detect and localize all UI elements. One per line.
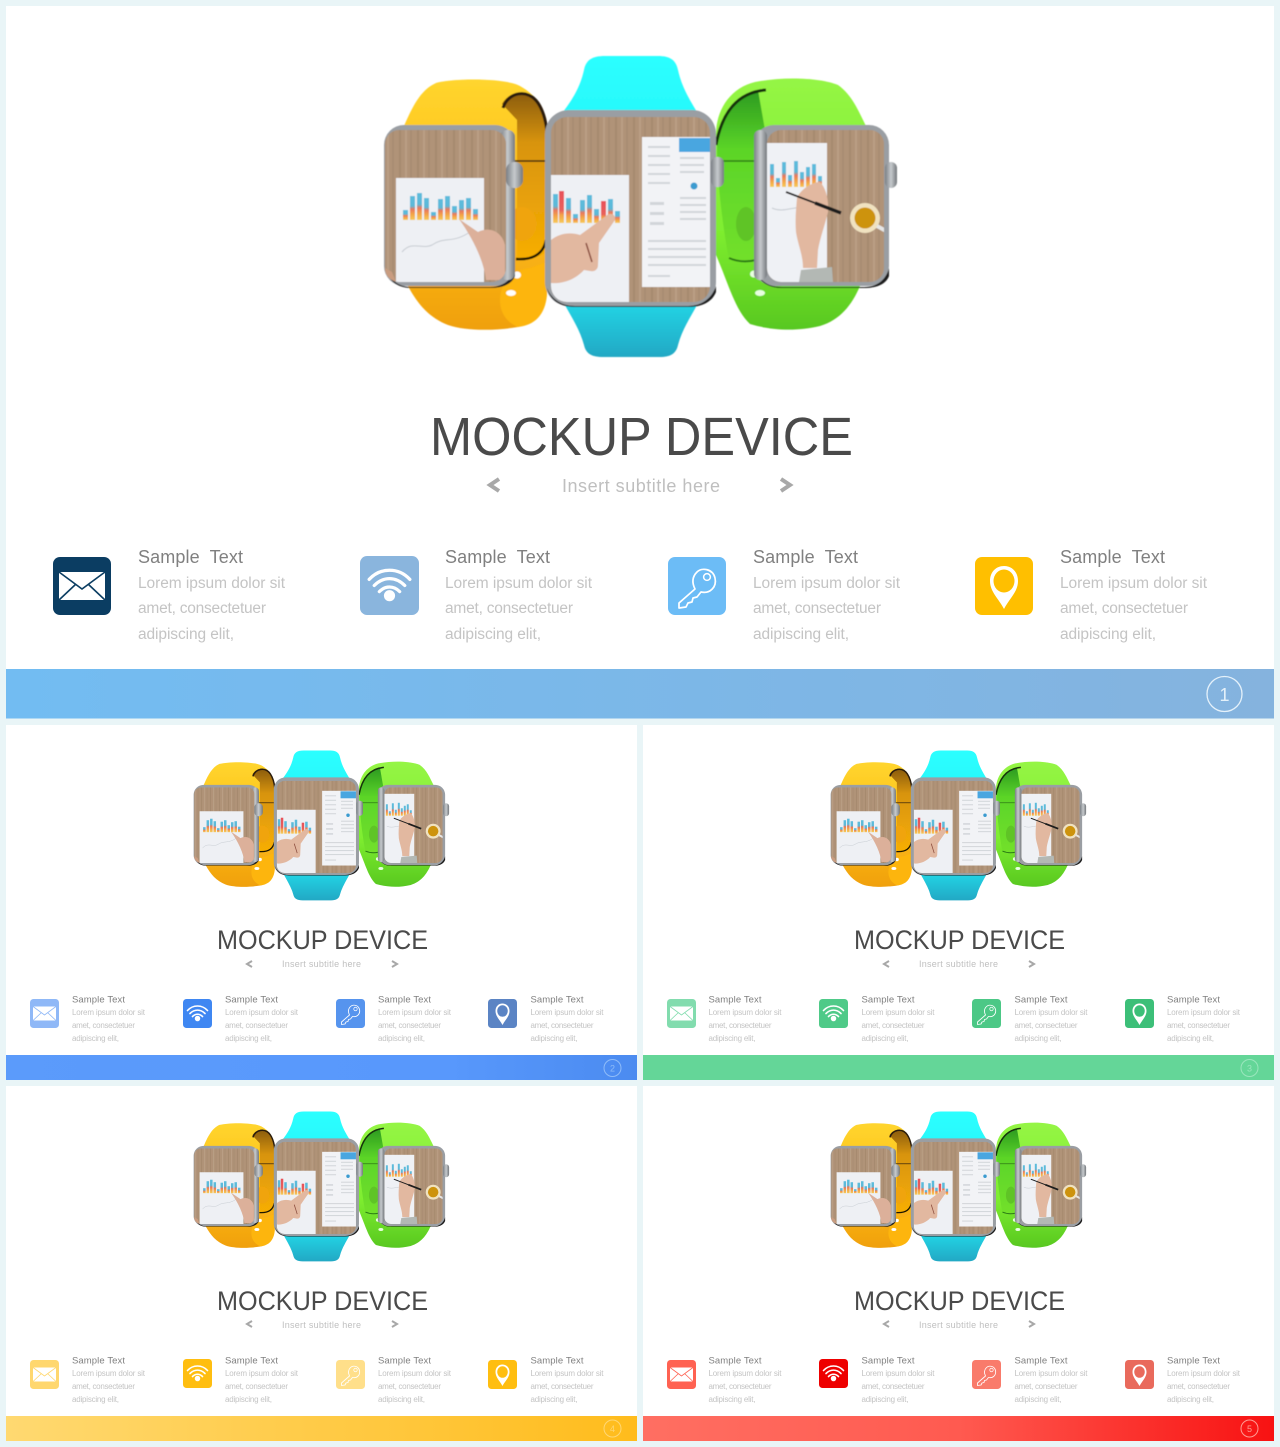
text block 1: Sample Text <box>72 1356 125 1366</box>
page number badge: 5 <box>1247 1424 1252 1434</box>
text block 4: Lorem ipsum dolor sit <box>530 1369 604 1378</box>
footer bar <box>6 1416 637 1441</box>
text block 4: amet, consectetuer <box>530 1382 594 1391</box>
text block 3: adipiscing elit, <box>378 1395 425 1404</box>
text block 3: amet, consectetuer <box>378 1382 441 1391</box>
arrow: left chevron <box>884 1321 889 1327</box>
image: three smart watches <box>831 750 1086 900</box>
text block 1: amet, consectetuer <box>138 600 266 617</box>
text block 2 <box>225 994 299 1043</box>
text block 2: adipiscing elit, <box>862 1034 908 1043</box>
text block 4: amet, consectetuer <box>1167 1021 1230 1030</box>
text block 3 <box>378 1356 452 1404</box>
text block 1: Lorem ipsum dolor sit <box>72 1008 146 1017</box>
text block 2: Sample Text <box>225 994 278 1006</box>
text block 1: adipiscing elit, <box>708 1034 756 1043</box>
arrow: left chevron <box>490 479 499 491</box>
text block 2: Lorem ipsum dolor sit <box>862 1008 935 1017</box>
text block 4: adipiscing elit, <box>1167 1395 1214 1404</box>
text block 3: Lorem ipsum dolor sit <box>1014 1369 1088 1378</box>
text block 4: Lorem ipsum dolor sit <box>530 1008 604 1017</box>
text block 3: amet, consectetuer <box>1014 1021 1078 1030</box>
icon: mail <box>667 999 696 1028</box>
text block 1 <box>708 1356 782 1404</box>
slide background <box>643 725 1274 1080</box>
text block 3 <box>378 994 452 1043</box>
title: MOCKUP DEVICE <box>854 925 1065 955</box>
text block 3: adipiscing elit, <box>378 1034 425 1043</box>
text block 4: amet, consectetuer <box>1167 1382 1230 1391</box>
title: MOCKUP DEVICE <box>854 1286 1065 1316</box>
text block 4: Lorem ipsum dolor sit <box>1060 575 1208 592</box>
text block 2: Lorem ipsum dolor sit <box>225 1008 299 1017</box>
text block 3 <box>1014 994 1088 1043</box>
arrow: left chevron <box>884 961 889 967</box>
text block 2: amet, consectetuer <box>862 1021 925 1030</box>
slide background <box>6 725 637 1080</box>
arrow: right chevron <box>1029 1321 1034 1327</box>
text block 4: adipiscing elit, <box>1167 1034 1214 1043</box>
text block 3: Sample Text <box>378 1356 431 1366</box>
text block 3: Sample Text <box>1014 1356 1068 1366</box>
arrow: right chevron <box>781 479 790 491</box>
text block 3: Lorem ipsum dolor sit <box>1014 1008 1088 1017</box>
panel: main slide <box>6 6 1274 718</box>
page number badge <box>604 1420 621 1437</box>
footer bar <box>643 1416 1274 1441</box>
page number badge <box>1241 1420 1258 1437</box>
text block 1: Sample Text <box>708 1356 762 1366</box>
text block 2: adipiscing elit, <box>862 1395 908 1404</box>
icon: wifi <box>819 1359 848 1388</box>
footer bar <box>6 1055 637 1080</box>
text block 1: adipiscing elit, <box>138 626 234 643</box>
text block 2: amet, consectetuer <box>445 600 573 617</box>
arrow: right chevron <box>1029 961 1034 967</box>
icon: mail <box>30 1360 59 1389</box>
page number badge <box>1207 676 1242 712</box>
text block 2: amet, consectetuer <box>225 1382 288 1391</box>
text block 4 <box>1167 994 1241 1043</box>
text block 2: adipiscing elit, <box>225 1395 272 1404</box>
slide background <box>6 6 1274 718</box>
text block 2: Sample Text <box>862 994 915 1006</box>
subtitle: Insert subtitle here <box>562 476 720 496</box>
footer bar <box>643 1055 1274 1080</box>
page number badge: 1 <box>1219 685 1230 705</box>
icon: key <box>336 999 365 1028</box>
text block 3: Lorem ipsum dolor sit <box>378 1369 452 1378</box>
text block 2: Sample Text <box>862 1356 915 1366</box>
text block 4: Sample Text <box>1167 1356 1220 1366</box>
panel: green slide <box>643 725 1274 1080</box>
text block 1: amet, consectetuer <box>72 1382 135 1391</box>
text block 3: Sample Text <box>378 994 431 1006</box>
icon: key <box>972 1360 1001 1389</box>
text block 1 <box>138 547 286 643</box>
page number badge: 3 <box>1247 1064 1252 1074</box>
text block 4: amet, consectetuer <box>1060 600 1188 617</box>
text block 4: adipiscing elit, <box>530 1034 578 1043</box>
text block 4: Sample Text <box>530 1356 584 1366</box>
slide background <box>643 1086 1274 1441</box>
icon: wifi <box>183 999 212 1028</box>
text block 4: Lorem ipsum dolor sit <box>1167 1369 1241 1378</box>
text block 3: amet, consectetuer <box>1014 1382 1078 1391</box>
slide background <box>6 1086 637 1441</box>
text block 4: Sample Text <box>1167 994 1220 1006</box>
arrow: right chevron <box>392 961 397 967</box>
text block 4: adipiscing elit, <box>530 1395 578 1404</box>
icon: location pin <box>1125 1360 1154 1389</box>
title: MOCKUP DEVICE <box>217 1286 428 1316</box>
page number badge <box>1241 1060 1258 1076</box>
text block 4 <box>530 1356 604 1404</box>
text block 3 <box>753 547 901 643</box>
text block 2: Sample Text <box>225 1356 278 1366</box>
image: three smart watches <box>194 1111 449 1261</box>
text block 1: adipiscing elit, <box>72 1395 119 1404</box>
image: three smart watches <box>831 1111 1086 1261</box>
text block 4: Sample Text <box>530 994 584 1006</box>
text block 1 <box>72 1356 146 1404</box>
text block 1 <box>72 994 146 1043</box>
text block 3: adipiscing elit, <box>1014 1034 1062 1043</box>
text block 3: Sample Text <box>753 547 858 567</box>
subtitle: Insert subtitle here <box>282 959 361 969</box>
image: three smart watches <box>194 750 449 900</box>
page number badge <box>604 1060 621 1076</box>
page number badge: 2 <box>610 1064 615 1074</box>
text block 1: Lorem ipsum dolor sit <box>708 1369 782 1378</box>
icon: key <box>972 999 1001 1028</box>
text block 2: amet, consectetuer <box>225 1021 288 1030</box>
page number badge: 4 <box>610 1424 615 1434</box>
text block 1: amet, consectetuer <box>708 1021 772 1030</box>
footer bar <box>6 669 1274 718</box>
text block 1: Lorem ipsum dolor sit <box>138 575 286 592</box>
subtitle: Insert subtitle here <box>919 1320 998 1330</box>
text block 3: amet, consectetuer <box>753 600 881 617</box>
icon: key <box>336 1360 365 1389</box>
text block 1: Sample Text <box>708 994 762 1006</box>
icon: location pin <box>975 557 1033 615</box>
panel: yellow slide <box>6 1086 637 1441</box>
text block 4 <box>530 994 604 1043</box>
text block 2: adipiscing elit, <box>445 626 541 643</box>
subtitle: Insert subtitle here <box>282 1320 361 1330</box>
text block 1: amet, consectetuer <box>708 1382 772 1391</box>
text block 2: Lorem ipsum dolor sit <box>445 575 593 592</box>
text block 4: Sample Text <box>1060 547 1165 567</box>
text block 2: adipiscing elit, <box>225 1034 272 1043</box>
icon: location pin <box>1125 999 1154 1028</box>
arrow: left chevron <box>247 1321 252 1327</box>
text block 1: Sample Text <box>72 994 125 1006</box>
text block 3 <box>1014 1356 1088 1404</box>
icon: wifi <box>360 556 419 615</box>
text block 1: amet, consectetuer <box>72 1021 135 1030</box>
icon: mail <box>53 557 111 615</box>
text block 1 <box>708 994 782 1043</box>
image: three smart watches <box>384 56 897 357</box>
text block 1: Lorem ipsum dolor sit <box>72 1369 146 1378</box>
icon: mail <box>667 1360 696 1389</box>
text block 4: amet, consectetuer <box>530 1021 594 1030</box>
text block 3: Lorem ipsum dolor sit <box>378 1008 452 1017</box>
text block 2 <box>445 547 593 643</box>
text block 2: Sample Text <box>445 547 550 567</box>
text block 2: Lorem ipsum dolor sit <box>225 1369 299 1378</box>
arrow: right chevron <box>392 1321 397 1327</box>
text block 2 <box>225 1356 299 1404</box>
text block 1: adipiscing elit, <box>708 1395 756 1404</box>
text block 3: Lorem ipsum dolor sit <box>753 575 901 592</box>
icon: location pin <box>488 1360 517 1389</box>
panel: blue slide <box>6 725 637 1080</box>
icon: key <box>668 557 726 615</box>
text block 2 <box>862 1356 935 1404</box>
icon: wifi <box>819 999 848 1028</box>
subtitle: Insert subtitle here <box>919 959 998 969</box>
text block 3: amet, consectetuer <box>378 1021 441 1030</box>
text block 1: adipiscing elit, <box>72 1034 119 1043</box>
text block 4: Lorem ipsum dolor sit <box>1167 1008 1241 1017</box>
icon: mail <box>30 999 59 1028</box>
text block 1: Lorem ipsum dolor sit <box>708 1008 782 1017</box>
icon: location pin <box>488 999 517 1028</box>
icon: wifi <box>183 1359 212 1388</box>
text block 3: adipiscing elit, <box>1014 1395 1062 1404</box>
text block 2 <box>862 994 935 1043</box>
text block 4: adipiscing elit, <box>1060 626 1156 643</box>
title: MOCKUP DEVICE <box>217 925 428 955</box>
arrow: left chevron <box>247 961 252 967</box>
text block 1: Sample Text <box>138 547 243 567</box>
panel: red slide <box>643 1086 1274 1441</box>
text block 4 <box>1167 1356 1241 1404</box>
text block 4 <box>1060 547 1208 643</box>
text block 3: adipiscing elit, <box>753 626 849 643</box>
text block 2: Lorem ipsum dolor sit <box>862 1369 935 1378</box>
text block 2: amet, consectetuer <box>862 1382 925 1391</box>
title: MOCKUP DEVICE <box>430 407 853 467</box>
text block 3: Sample Text <box>1014 994 1068 1006</box>
